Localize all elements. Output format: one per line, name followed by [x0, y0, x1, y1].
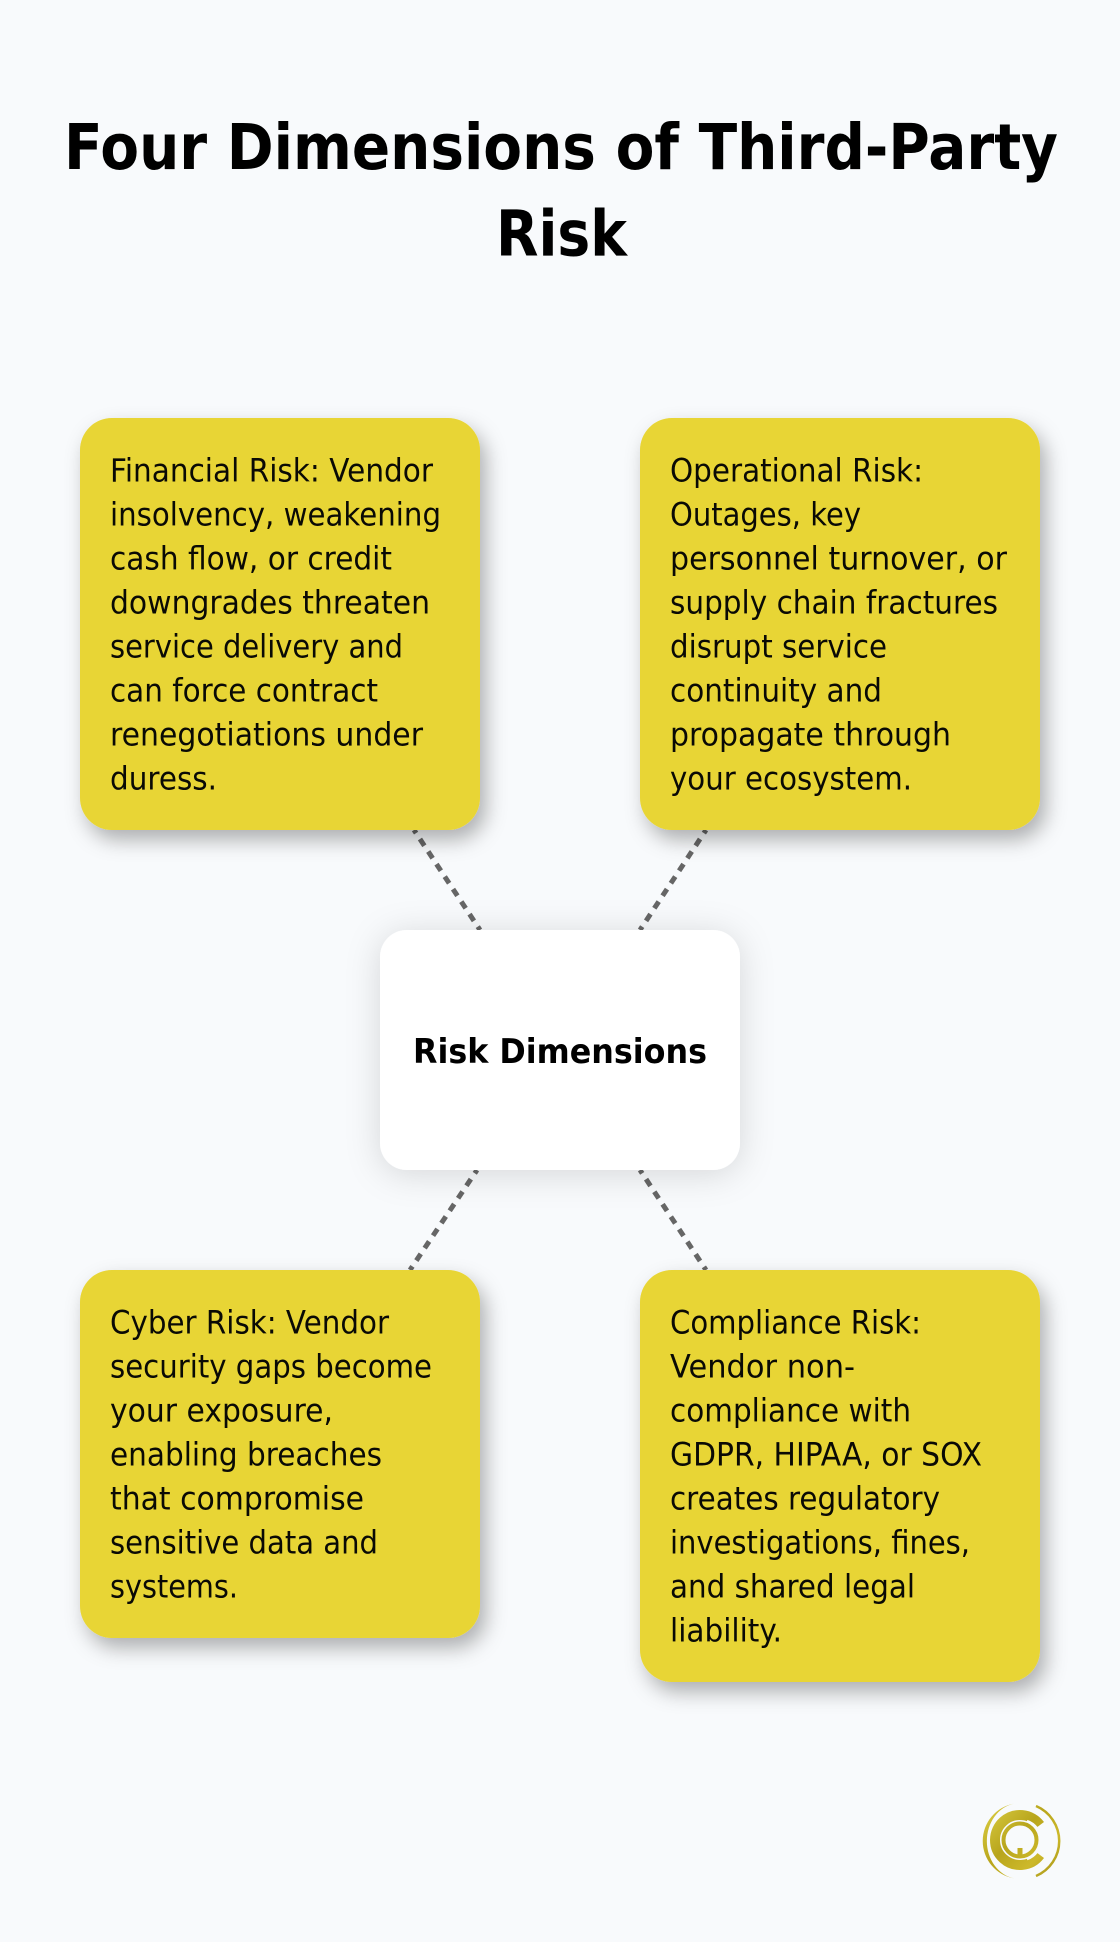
panel: cyber risk: systems.: [110, 1568, 238, 1606]
panel: compliance risk: investigations, fines,: [670, 1524, 970, 1562]
panel: operational risk: supply chain fractures: [670, 584, 998, 622]
connector: center to financial risk: [414, 830, 480, 930]
panel: operational risk: personnel turnover, or: [670, 540, 1008, 578]
panel: financial risk: service delivery and: [110, 628, 403, 666]
panel: compliance risk: liability.: [670, 1612, 782, 1650]
panel: operational risk: propagate through: [670, 716, 951, 754]
panel: financial risk: [80, 418, 480, 830]
panel: financial risk: downgrades threaten: [110, 584, 430, 622]
panel: compliance risk: [640, 1270, 1040, 1682]
panel: financial risk: can force contract: [110, 672, 378, 710]
panel: compliance risk: Vendor non-: [670, 1348, 855, 1386]
panel: operational risk: Operational Risk:: [670, 452, 923, 490]
title: Risk: [496, 198, 629, 270]
panel: financial risk: duress.: [110, 760, 217, 798]
panel: operational risk: [640, 418, 1040, 830]
connector: center to cyber risk: [410, 1170, 477, 1270]
panel: center node: [380, 930, 740, 1170]
panel: cyber risk: security gaps become: [110, 1348, 432, 1386]
panel: cyber risk: your exposure,: [110, 1392, 333, 1430]
panel: compliance risk: Compliance Risk:: [670, 1304, 921, 1342]
title: [64, 111, 1058, 270]
center label: Risk Dimensions: [413, 1032, 707, 1072]
panel: cyber risk: enabling breaches: [110, 1436, 382, 1474]
panel: cyber risk: sensitive data and: [110, 1524, 378, 1562]
panel: operational risk: your ecosystem.: [670, 760, 912, 798]
panel: operational risk: continuity and: [670, 672, 882, 710]
panel: cyber risk: that compromise: [110, 1480, 364, 1518]
panel: cyber risk: Cyber Risk: Vendor: [110, 1304, 390, 1342]
panel: compliance risk: creates regulatory: [670, 1480, 940, 1518]
panel: compliance risk: GDPR, HIPAA, or SOX: [670, 1436, 982, 1474]
panel: financial risk: cash flow, or credit: [110, 540, 392, 578]
icon: gold logo: [983, 1804, 1059, 1878]
connector: center to compliance risk: [640, 1170, 706, 1270]
panel: compliance risk: and shared legal: [670, 1568, 915, 1606]
panel: financial risk: renegotiations under: [110, 716, 424, 754]
panel: financial risk: insolvency, weakening: [110, 496, 441, 534]
panel: cyber risk: [80, 1270, 480, 1638]
panel: operational risk: disrupt service: [670, 628, 887, 666]
connector: center to operational risk: [640, 830, 706, 930]
panel: compliance risk: compliance with: [670, 1392, 911, 1430]
panel: financial risk: Financial Risk: Vendor: [110, 452, 434, 490]
panel: operational risk: Outages, key: [670, 496, 861, 534]
